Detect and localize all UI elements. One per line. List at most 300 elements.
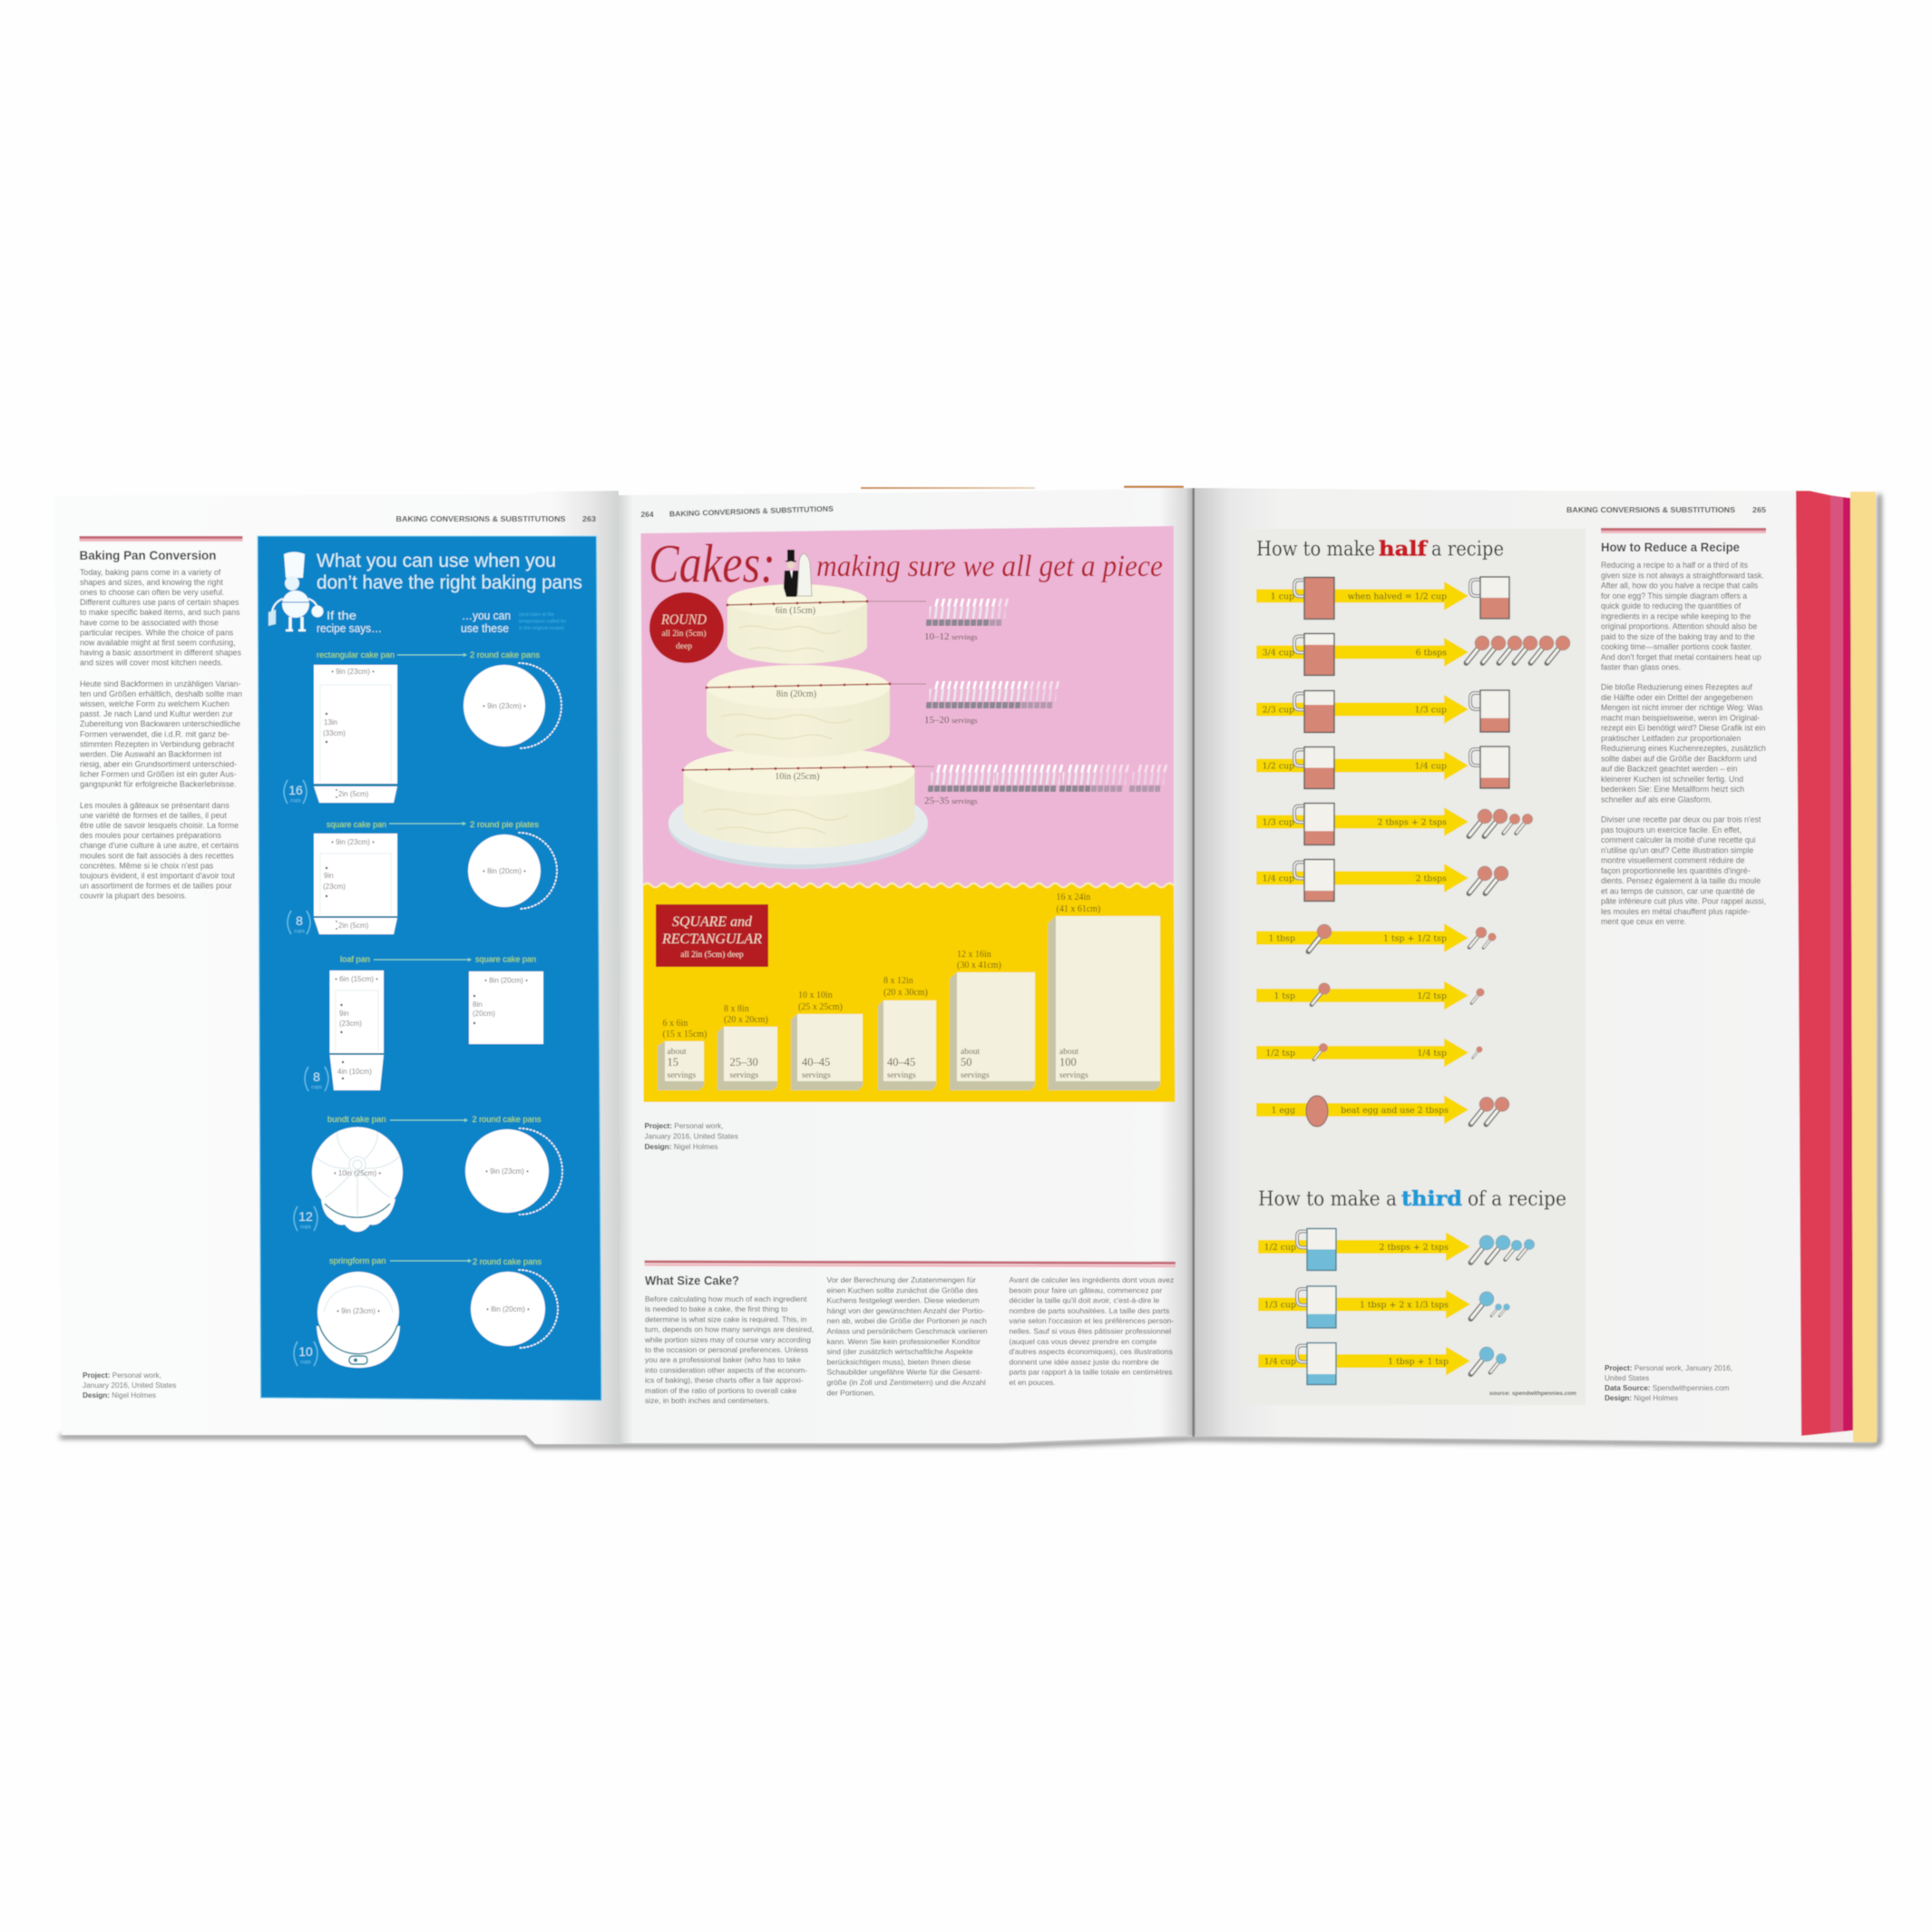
badge: 8 cups xyxy=(305,1067,328,1091)
cake: 8 x 12in: 40–45 xyxy=(887,1056,915,1068)
row: third of 1/3 cup xyxy=(1258,1286,1510,1328)
row: 1/2 tsp xyxy=(1256,1038,1482,1067)
text block: english: After all, how do you halve a recipe that calls xyxy=(1601,581,1759,590)
row: 2/3 cup xyxy=(1256,690,1509,733)
heading: what size cake: What Size Cake? xyxy=(645,1273,739,1288)
text block: german: einen Kuchen sollte zunächst die Größe des xyxy=(827,1285,978,1294)
servings: 15-20 slices: 15–20 servings xyxy=(924,715,978,726)
text block: french: les moules en métal chauffent plus rapide- xyxy=(1601,907,1750,916)
text block: english: Reducing a recipe to a half or a third of its xyxy=(1601,561,1749,570)
icon: square cake pan: • 8in (20cm) • xyxy=(484,976,528,985)
text block: french: et au temps de cuisson, car une quantité de xyxy=(1601,886,1755,895)
measure: 10in xyxy=(682,766,934,782)
icon: rectangular pan xyxy=(314,665,397,803)
label: square and rectangular: SQUARE and xyxy=(672,914,753,930)
measure: 8in xyxy=(706,683,926,699)
servings: 10-12 slices: 10–12 servings xyxy=(924,631,978,642)
text block: french intro: une variété de formes et de tailles, il peut xyxy=(80,811,227,820)
row: 1/2 tsp: 1/2 tsp xyxy=(1265,1049,1295,1059)
icon: chef character xyxy=(268,551,323,630)
cake: 8 x 12in: 8 x 12in xyxy=(883,976,913,986)
cake: 16 x 24in: 16 x 24in xyxy=(1056,893,1090,903)
text block: french intro: concrètes. Même si le choix n'est pas xyxy=(80,861,214,870)
icon: square pan: 9in xyxy=(324,872,334,880)
text block: english: given size is not always a straightforward task. xyxy=(1601,571,1764,580)
text block: german: sind (der zusätzlich wirtschaftliche Aspekte xyxy=(827,1347,973,1356)
row: 1 cup xyxy=(1256,577,1509,619)
text block: english: And don't forget that metal containers heat up xyxy=(1601,652,1761,661)
note: bake temperature: (and bake at the xyxy=(519,612,554,618)
cake: 12 x 16in: about xyxy=(961,1048,980,1057)
row: 2/3 cup: 1/3 cup xyxy=(1415,706,1447,715)
cake: 8 x 8in xyxy=(717,1004,777,1090)
cake: 8 x 12in xyxy=(878,976,936,1090)
row: 1/2 cup: 1/2 cup xyxy=(1263,762,1294,771)
text block: english intro: ones to choose can often be very useful. xyxy=(80,588,224,597)
icon: round pie plates: • 8in (20cm) • xyxy=(483,867,526,875)
text block: german intro: passt. Je nach Land und Kultur werden zur xyxy=(80,709,233,718)
icon: bride and groom xyxy=(784,550,812,597)
text block: german intro: Zubereitung von Backwaren unterschiedliche xyxy=(80,719,240,728)
row: third of 1/4 cup: 1 tbsp + 1 tsp xyxy=(1388,1357,1449,1367)
icon: bundt pan: • 10in (25cm) • xyxy=(334,1169,381,1177)
icon: loaf pan xyxy=(330,971,384,1090)
title: half a recipe: How to make xyxy=(1256,539,1375,561)
row: 1 egg: beat egg and use 2 tbsps xyxy=(1341,1106,1449,1116)
text block: french: façon proportionnelle les quantités d'ingré- xyxy=(1601,866,1751,875)
cake: 6 x 6in: 6 x 6in xyxy=(662,1019,688,1029)
text block: french: dients. Pensez également à la taille du moule xyxy=(1601,876,1761,885)
badge: 16 cups xyxy=(284,780,307,804)
row: 1/2 cup xyxy=(1256,746,1509,789)
text block: english: while portion sizes may of course vary according xyxy=(644,1335,811,1344)
icon: loaf pan: • 6in (15cm) • xyxy=(335,975,378,983)
note: bake temperature: in the original recipe) xyxy=(519,626,564,631)
text block: german: kann. Wenn Sie kein professioneller Konditor xyxy=(827,1337,981,1346)
title xyxy=(317,551,582,593)
text block: german: Reduzierung eines Kuchenrezeptes, zusätzlich xyxy=(1601,744,1766,753)
row: 1/3 cup: 1/3 cup xyxy=(1263,818,1294,827)
column label: if the recipe says xyxy=(317,609,382,635)
text block: english: to the occasion or personal preferences. Unless xyxy=(645,1345,808,1354)
text block: english: faster than glass ones. xyxy=(1601,662,1681,671)
project credits: Nigel Holmes xyxy=(110,1391,156,1400)
text block: english intro: shapes and sizes, and knowing the right xyxy=(80,578,223,587)
servings: 25-35 slices: 25–35 servings xyxy=(924,795,978,806)
text block: french: comment calculer la moitié d'une recette qui xyxy=(1601,835,1755,844)
text block: english: paid to the size of the baking tray and to the xyxy=(1601,632,1755,641)
cake: 16 x 24in xyxy=(1049,893,1160,1090)
icon: square cake pan xyxy=(469,971,543,1044)
project credits: Design: xyxy=(83,1391,110,1400)
badge: 10 cups: 10 xyxy=(298,1344,313,1359)
row: bundt cake pan: bundt cake pan xyxy=(327,1114,386,1124)
label: square and rectangular xyxy=(656,904,768,967)
text block: german: hängt von der gewünschten Anzahl der Portio- xyxy=(827,1306,985,1315)
text block: english: quick guide to reducing the quantities of xyxy=(1601,601,1742,610)
note: bake temperature: temperature called for xyxy=(519,619,567,624)
text block: german: Mengen ist nicht immer der richtige Weg: Was xyxy=(1601,703,1763,712)
tier: 10in xyxy=(684,746,915,848)
text block: french: ment que ceux en verre. xyxy=(1601,917,1686,926)
text block: english intro: to make specific baked items, and such pans xyxy=(80,608,240,617)
text block: english: size, in both inches and centimeters. xyxy=(645,1396,769,1405)
text block: german intro: gangspunkt für erfolgreiche Backerlebnisse. xyxy=(80,780,237,789)
row: 3/4 cup: 6 tbsps xyxy=(1416,648,1447,659)
row: 3/4 cup xyxy=(1256,633,1570,675)
row: 1 cup: 1 cup xyxy=(1271,591,1294,602)
icon: springform pan: • 9in (23cm) • xyxy=(337,1307,380,1315)
row: springform pan: springform pan xyxy=(329,1255,386,1265)
row: square cake pan: square cake pan xyxy=(327,819,386,829)
running header: BAKING CONVERSIONS & SUBSTITUTIONS xyxy=(395,514,566,523)
icon: square pan: • 9in (23cm) • xyxy=(331,838,375,846)
servings: 15-20 slices xyxy=(924,681,1059,726)
text block: german: macht man beispielsweise, wenn im Original- xyxy=(1601,713,1760,722)
project credits: Project: xyxy=(644,1122,672,1130)
badge: 16 cups: cups xyxy=(290,798,301,804)
cake: 12 x 16in: 50 xyxy=(961,1056,972,1068)
title: third of a recipe: of a recipe xyxy=(1468,1188,1566,1211)
label: square and rectangular: RECTANGULAR xyxy=(661,932,762,947)
row: 2/3 cup: 2/3 cup xyxy=(1263,706,1294,715)
text block: german: rezept ein Ei benötigt wird? Diese Grafik ist ein xyxy=(1601,724,1766,733)
measure: 6in: 6in (15cm) xyxy=(776,606,815,616)
text block: english intro: Different cultures use pans of certain shapes xyxy=(80,598,239,607)
row: 1/3 cup xyxy=(1256,804,1533,845)
cake: 12 x 16in: 12 x 16in xyxy=(957,950,991,960)
project credits: Project: xyxy=(1605,1364,1632,1372)
icon: loaf pan: 9in xyxy=(339,1010,349,1018)
row: rectangular cake pan: 2 round cake pans xyxy=(470,649,540,659)
text block: french: besoin pour faire un gâteau, commencez par xyxy=(1009,1285,1162,1294)
text block: english: Before calculating how much of each ingredient xyxy=(645,1294,807,1303)
cake: 8 x 8in: (20 x 20cm) xyxy=(724,1015,768,1025)
row: third of 1/4 cup: 1/4 cup xyxy=(1264,1357,1296,1367)
icon: square cake pan: (20cm) xyxy=(473,1010,495,1018)
title: don’t have the right baking pans xyxy=(317,572,582,593)
row: 1 egg xyxy=(1256,1096,1509,1127)
icon: round cake pans xyxy=(471,1270,558,1348)
cake: 16 x 24in: 100 xyxy=(1059,1056,1077,1068)
text block: german intro: wissen, welche Form zu welchem Kuchen xyxy=(79,699,229,708)
row: rectangular cake pan: rectangular cake pan xyxy=(317,649,395,659)
cake: 16 x 24in: servings xyxy=(1059,1071,1088,1080)
text block: german: die Hälfte oder ein Drittel der angegebenen xyxy=(1601,693,1752,702)
heading: how to reduce a recipe: How to Reduce a Recipe xyxy=(1601,540,1740,554)
servings: 10-12 slices xyxy=(924,599,1009,642)
icon: round pans: • 9in (23cm) • xyxy=(483,702,526,710)
project credits: United States xyxy=(1605,1374,1649,1382)
text block: french: pas toujours un exercice facile. En effet, xyxy=(1601,825,1742,834)
project credits: Data Source: xyxy=(1605,1384,1651,1392)
badge: 10 cups xyxy=(294,1342,317,1366)
badge: 12 cups: cups xyxy=(300,1225,311,1230)
icon: rectangular pan: (33cm) xyxy=(323,729,346,737)
text block: french intro: couvrir la plupart des besoins. xyxy=(80,891,187,900)
text block: german: Kuchens festgelegt werden. Diese wiederum xyxy=(827,1296,980,1305)
row: third of 1/3 cup: 1/3 cup xyxy=(1264,1301,1296,1310)
badge: round: deep xyxy=(676,642,692,651)
project credits: Design: xyxy=(1605,1394,1632,1402)
title: third of a recipe xyxy=(1258,1187,1566,1211)
row: 1 tbsp: 1 tbsp xyxy=(1268,934,1295,943)
row: 1/2 tsp: 1/4 tsp xyxy=(1417,1049,1447,1059)
panel: middle page xyxy=(619,488,1195,1443)
badge: round xyxy=(649,592,724,663)
page number: 265 xyxy=(1752,505,1766,514)
panel: left page xyxy=(54,491,620,1444)
section rule xyxy=(644,1262,1176,1266)
badge: round: ROUND xyxy=(660,612,707,628)
measure: 8in: 8in (20cm) xyxy=(776,689,816,699)
icon: round cake pans: • 9in (23cm) • xyxy=(485,1167,529,1176)
cake: 12 x 16in: servings xyxy=(961,1071,990,1080)
row: square cake pan xyxy=(288,819,557,934)
text block: english: original proportions. Attention should also be xyxy=(1601,622,1757,631)
text block: german intro: Formen verwendet, die i.d.R. mit ganz be- xyxy=(80,729,229,738)
row: third of 1/2 cup: 1/2 cup xyxy=(1264,1243,1296,1253)
row: loaf pan: loaf pan xyxy=(340,954,370,963)
text block: french: donnent une idée assez juste du nombre de xyxy=(1009,1357,1159,1366)
text block: english intro: now available might at first seem confusing, xyxy=(80,638,236,647)
column label: you can use these: use these xyxy=(461,621,509,635)
icon: springform pan xyxy=(317,1272,400,1368)
row: third of 1/2 cup xyxy=(1258,1228,1535,1270)
text block: french: n'utilise qu'un œuf? Cette illustration simple xyxy=(1601,845,1753,854)
row: bundt cake pan: 2 round cake pans xyxy=(472,1114,542,1124)
text block: german intro: ten und Größen erhältlich, deshalb sollte man xyxy=(80,689,242,698)
cake: 12 x 16in xyxy=(950,950,1035,1090)
row: 3/4 cup: 3/4 cup xyxy=(1263,648,1294,659)
text block: french: varie selon l'occasion et les préférences person- xyxy=(1009,1316,1174,1325)
row: bundt cake pan xyxy=(294,1114,562,1232)
icon: square cake pan: 8in xyxy=(473,1000,483,1009)
text block: english: turn, depends on how many servings are desired, xyxy=(645,1325,814,1334)
cake: 6 x 6in xyxy=(658,1019,707,1090)
cake: 10 x 10in: (25 x 25cm) xyxy=(798,1002,843,1012)
text block: german: auf die Backzeit geachtet werden – ein xyxy=(1601,764,1737,773)
row: loaf pan xyxy=(305,954,543,1091)
project credits: Nigel Holmes xyxy=(672,1143,718,1151)
text block: english: mation of the ratio of portions to overall cake xyxy=(645,1386,797,1395)
title: half a recipe: half xyxy=(1379,537,1429,561)
page edge colour strips on top xyxy=(561,486,1184,498)
text block: french: (auquel cas vous devez prendre en compte xyxy=(1009,1337,1157,1346)
panel: right page xyxy=(1192,488,1805,1442)
title: third of a recipe: How to make a xyxy=(1258,1188,1397,1211)
cake: 12 x 16in: (30 x 41cm) xyxy=(957,961,1001,971)
text block: german: schneller auf als eine Glasform. xyxy=(1601,795,1712,804)
icon: loaf pan: 4in (10cm) xyxy=(337,1068,372,1076)
text block: french intro: moules sont de fait associés à des recettes xyxy=(80,851,234,860)
running header: BAKING CONVERSIONS & SUBSTITUTIONS xyxy=(1566,505,1735,514)
text block: french: et en pouces. xyxy=(1009,1378,1056,1387)
text block: german: berücksichtigen muss), bieten Ihnen diese xyxy=(827,1357,971,1366)
text block: french intro: Les moules à gâteaux se présentant dans xyxy=(80,801,229,810)
cake: 16 x 24in: about xyxy=(1059,1048,1078,1057)
panel: blue baking pans chart xyxy=(258,536,601,1400)
section rule xyxy=(80,536,243,542)
text block: french: montre visuellement comment réduire de xyxy=(1601,856,1745,865)
text block: german intro: riesig, aber ein Grundsortiment unterschied- xyxy=(80,759,237,768)
icon: square pan: 2in (5cm) xyxy=(338,922,369,930)
row: third of 1/3 cup: 1 tbsp + 2 x 1/3 tsps xyxy=(1360,1301,1449,1310)
heading: baking pan conversion: Baking Pan Conversion xyxy=(80,548,216,562)
text block: german: nen ab, wobei die Größe der Portionen je nach xyxy=(827,1316,987,1325)
title: cakes: Cakes: xyxy=(649,533,776,593)
page number: 263 xyxy=(582,514,596,523)
cake: 10 x 10in: 40–45 xyxy=(802,1056,830,1068)
text block: english: for one egg? This simple diagram offers a xyxy=(1601,591,1747,600)
badge: 12 cups xyxy=(294,1206,317,1231)
project credits: January 2016, United States xyxy=(644,1132,738,1141)
title: half a recipe: a recipe xyxy=(1431,539,1504,561)
text block: french intro: toujours évident, il est important d'avoir tout xyxy=(80,871,235,880)
row: 1 cup: when halved = 1/2 cup xyxy=(1348,591,1447,602)
text block: french: décider la taille qu'il doit avoir, c'est-à-dire le xyxy=(1009,1296,1160,1305)
project credits: Nigel Holmes xyxy=(1632,1394,1678,1402)
cake: 10 x 10in xyxy=(791,990,863,1090)
row: 1 egg: 1 egg xyxy=(1272,1106,1295,1116)
project credits: January 2016, United States xyxy=(83,1381,176,1390)
text block: german: Die bloße Reduzierung eines Rezeptes auf xyxy=(1601,682,1752,691)
row: 1 tbsp xyxy=(1256,923,1496,952)
source note: source: spendwithpennies.com xyxy=(1489,1391,1576,1397)
row: 1/2 cup: 1/4 cup xyxy=(1415,762,1447,771)
title: What you can use when you xyxy=(317,551,556,571)
text block: german: der Portionen. xyxy=(827,1388,875,1397)
illustration: tiered cake xyxy=(668,550,928,869)
label: square and rectangular: all 2in (5cm) deep xyxy=(680,950,744,960)
text block: english: is needed to bake a cake, the first thing to xyxy=(645,1304,788,1313)
icon: round pans xyxy=(463,663,561,748)
cake: 6 x 6in: (15 x 15cm) xyxy=(662,1029,707,1039)
column label: if the recipe says: recipe says… xyxy=(317,621,382,635)
icon: square pan: (23cm) xyxy=(323,883,346,891)
cake: 16 x 24in: (41 x 61cm) xyxy=(1056,904,1100,914)
text block: french intro: un assortiment de formes et de tailles pour xyxy=(80,881,232,890)
text block: french: Avant de calculer les ingrédients dont vous avez xyxy=(1009,1275,1174,1284)
title: cakes: making sure we all get a piece xyxy=(816,550,1163,583)
cake: 8 x 8in: 25–30 xyxy=(729,1056,758,1068)
cake: 10 x 10in: 10 x 10in xyxy=(798,990,833,1000)
text block: german: Schaubilder ungefähre Werte für die Gesamt- xyxy=(827,1368,982,1377)
text block: german: sollte dabei auf die Größe der Backform und xyxy=(1601,754,1757,763)
note: bake temperature xyxy=(519,612,567,631)
title: third of a recipe: third xyxy=(1401,1187,1462,1211)
row: 1/4 cup: 2 tbsps xyxy=(1416,874,1447,883)
badge: 8 cups: cups xyxy=(294,929,305,934)
badge: 12 cups: 12 xyxy=(298,1209,313,1224)
text block: french intro: être utile de savoir lesquels choisir. La forme xyxy=(80,821,239,830)
row: 1/4 cup: 1/4 cup xyxy=(1263,874,1294,883)
cake: 6 x 6in: 15 xyxy=(668,1056,678,1068)
icon: loaf pan: (23cm) xyxy=(339,1020,362,1028)
panel: recipe chart xyxy=(1240,529,1586,1405)
text block: english: ics of baking), these charts offer a fair approxi- xyxy=(645,1376,804,1385)
text block: german: Vor der Berechnung der Zutatenmengen für xyxy=(827,1275,976,1284)
text block: german intro: werden. Die Auswahl an Backformen ist xyxy=(79,749,222,758)
project credits: Spendwithpennies.com xyxy=(1651,1384,1730,1392)
text block: english: ingredients in a recipe while keeping to the xyxy=(1601,611,1751,620)
text block: french: Diviser une recette par deux ou par trois n'est xyxy=(1601,815,1761,824)
title: cakes xyxy=(649,533,1163,593)
text block: german intro: licher Formen und Größen ist ein guter Aus- xyxy=(80,769,237,778)
text block: german: bedenken Sie: Eine Metallform heizt sich xyxy=(1601,785,1744,794)
text block: english: determine is what size cake is required. This, in xyxy=(645,1314,807,1323)
page number: 264 xyxy=(640,510,654,519)
measure: 10in: 10in (25cm) xyxy=(775,772,820,782)
text block: english intro: having a basic assortment in different shapes xyxy=(80,648,241,657)
project credits: Design: xyxy=(644,1143,672,1151)
column label: you can use these: …you can xyxy=(462,609,511,622)
servings: 25-35 slices xyxy=(924,765,1167,806)
title: half a recipe xyxy=(1256,537,1504,561)
icon: round pie plates xyxy=(468,833,557,909)
cake: 6 x 6in: about xyxy=(668,1048,687,1057)
panel: pink round cakes xyxy=(640,526,1174,893)
cake: 8 x 8in: servings xyxy=(729,1071,758,1080)
badge: round: all 2in (5cm) xyxy=(661,629,707,639)
badge: 8 cups: 8 xyxy=(296,913,303,928)
badge: 8 cups: 8 xyxy=(313,1069,320,1084)
row: springform pan: 2 round cake pans xyxy=(473,1256,542,1266)
badge: 8 cups xyxy=(288,911,310,934)
text block: english: into consideration other aspects of the econom- xyxy=(645,1365,807,1374)
icon: square pan xyxy=(314,834,397,934)
icon: rectangular pan: 13in xyxy=(324,718,337,727)
row: 1 tsp xyxy=(1256,981,1484,1010)
panel: yellow square and rectangular cakes xyxy=(643,883,1176,1102)
project credits: Personal work, xyxy=(110,1371,161,1380)
text block: german intro: stimmten Rezepten in Verbindung gebracht xyxy=(80,739,235,748)
project credits: Personal work, xyxy=(672,1122,723,1130)
row: rectangular cake pan xyxy=(284,649,561,804)
text block: german: Anlass und persönlichem Geschmack variieren xyxy=(827,1326,988,1335)
row: third of 1/4 cup xyxy=(1258,1342,1506,1384)
cake: 8 x 12in: (20 x 30cm) xyxy=(883,988,928,998)
text block: german: praktischer Leitfaden zur proportionalen xyxy=(1601,734,1741,743)
text block: french intro: change d'une culture à une autre, et certains xyxy=(80,841,239,850)
row: third of 1/2 cup: 2 tbsps + 2 tsps xyxy=(1379,1243,1449,1253)
cake plate xyxy=(668,781,928,869)
project credits: Personal work, January 2016, xyxy=(1632,1364,1732,1372)
icon: round cake pans: • 8in (20cm) • xyxy=(486,1305,530,1313)
row: springform pan xyxy=(294,1255,558,1368)
row: 1/4 cup xyxy=(1256,860,1508,902)
project credits: Project: xyxy=(83,1371,110,1380)
icon: rectangular pan: 2in (5cm) xyxy=(338,790,369,798)
measure: 6in xyxy=(727,600,926,616)
book edge colour strips xyxy=(1796,491,1877,1442)
column label: if the recipe says: If the xyxy=(327,609,356,622)
text block: english: you are a professional baker (who has to take xyxy=(645,1355,801,1364)
text block: english intro: Today, baking pans come in a variety of xyxy=(80,568,221,577)
text block: english intro: have come to be associated with those xyxy=(80,618,219,627)
cake: 8 x 12in: servings xyxy=(887,1071,916,1080)
icon: round cake pans xyxy=(465,1128,562,1215)
text block: german: größe (in Zoll und Zentimetern) und die Anzahl xyxy=(827,1378,986,1387)
text block: german intro: Heute sind Backformen in unzähligen Varian- xyxy=(80,679,240,688)
row: 1/3 cup: 2 tbsps + 2 tsps xyxy=(1377,818,1447,827)
badge: 8 cups: cups xyxy=(311,1085,322,1090)
badge: 10 cups: cups xyxy=(300,1360,311,1365)
text block: french: nelles. Sauf si vous êtes pâtissier professionnel xyxy=(1009,1326,1171,1335)
tier: 6in xyxy=(727,584,867,664)
cake: 10 x 10in: servings xyxy=(802,1071,831,1080)
icon: bundt pan xyxy=(312,1127,403,1232)
